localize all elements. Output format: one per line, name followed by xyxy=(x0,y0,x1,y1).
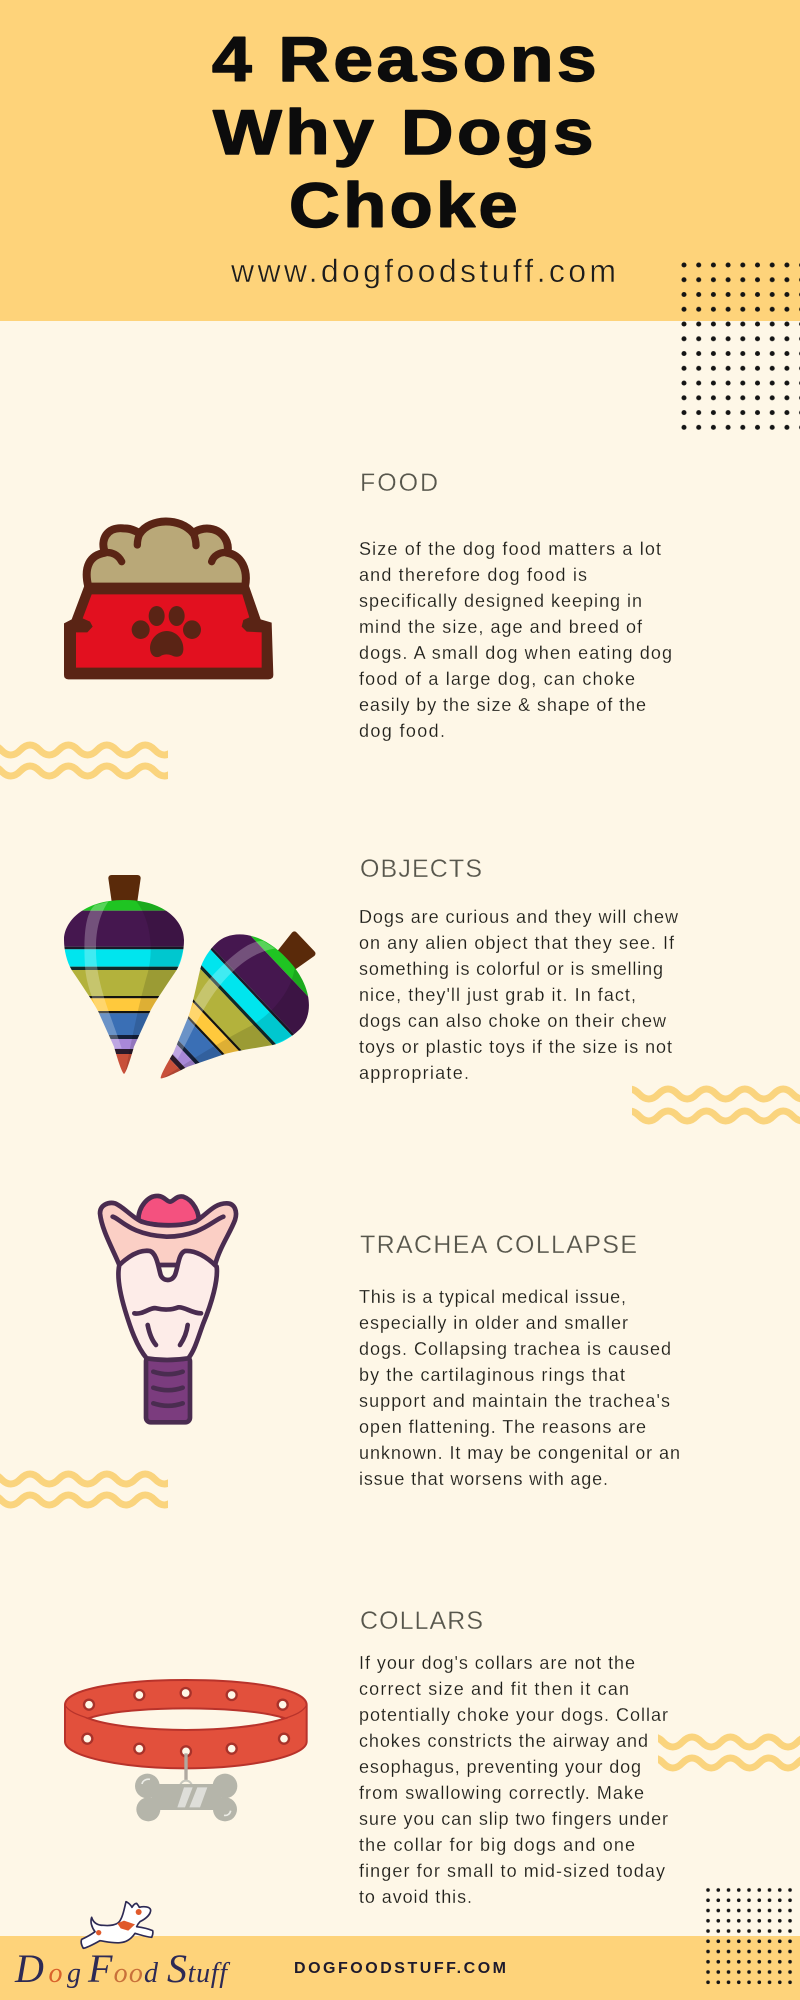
text: collars: potentially choke your dogs. Collar xyxy=(359,1705,668,1725)
text: collars: sure you can slip two fingers under xyxy=(359,1809,668,1829)
text: trachea collapse: open flattening. The reasons are xyxy=(359,1417,646,1437)
text: collars: correct size and fit then it can xyxy=(359,1679,629,1699)
text: food: and therefore dog food is xyxy=(359,565,587,585)
dot pattern: bottom right xyxy=(703,1885,795,1987)
text: food: dogs. A small dog when eating dog xyxy=(359,643,672,663)
panel: collars xyxy=(65,1607,800,1907)
text: food: specifically designed keeping in xyxy=(359,591,642,611)
text: collars: esophagus, preventing your dog xyxy=(359,1757,641,1777)
text: food xyxy=(359,539,672,741)
decorative wave: objects xyxy=(620,1089,800,1121)
panel: trachea collapse xyxy=(0,1196,680,1505)
text: objects xyxy=(359,907,679,1083)
text: food: food of a large dog, can choke xyxy=(359,669,635,689)
title: 4 Reasons xyxy=(212,25,600,95)
text: collars: If your dog's collars are not the xyxy=(359,1653,635,1673)
text: collars: chokes constricts the airway and xyxy=(359,1731,648,1751)
text: food: Size of the dog food matters a lot xyxy=(359,539,661,559)
text: trachea collapse: This is a typical medical issue, xyxy=(359,1287,626,1307)
title: Why Dogs xyxy=(213,98,597,168)
logo wordmark: Dog xyxy=(14,1946,81,1991)
text: food: mind the size, age and breed of xyxy=(359,617,643,637)
text: collars: to avoid this. xyxy=(359,1887,472,1907)
icon: food bowl xyxy=(64,521,273,679)
dot pattern: top right xyxy=(677,258,800,435)
text: trachea collapse: dogs. Collapsing trachea is caused xyxy=(359,1339,671,1359)
text: food: dog food. xyxy=(359,721,445,741)
heading: objects: OBJECTS xyxy=(360,855,482,883)
text: collars: finger for small to mid-sized today xyxy=(359,1861,665,1881)
text: trachea collapse: support and maintain the trachea's xyxy=(359,1391,670,1411)
text: trachea collapse: unknown. It may be congenital or an xyxy=(359,1443,680,1463)
icon: jumping dog xyxy=(81,1902,153,1948)
text: trachea collapse: by the cartilaginous rings that xyxy=(359,1365,625,1385)
text: collars xyxy=(359,1653,668,1907)
text: collars: from swallowing correctly. Make xyxy=(359,1783,644,1803)
title xyxy=(212,25,600,241)
icon: dog collar with bone tag xyxy=(65,1680,307,1821)
text: objects: Dogs are curious and they will chew xyxy=(359,907,679,927)
text: objects: appropriate. xyxy=(359,1063,469,1083)
heading: food: FOOD xyxy=(360,469,438,497)
website url: www.dogfoodstuff.com xyxy=(230,253,616,289)
text: objects: something is colorful or is smelling xyxy=(359,959,663,979)
logo wordmark xyxy=(14,1946,230,1991)
text: collars: the collar for big dogs and one xyxy=(359,1835,635,1855)
heading: trachea collapse: TRACHEA COLLAPSE xyxy=(360,1231,637,1259)
text: objects: dogs can also choke on their chew xyxy=(359,1011,667,1031)
text: trachea collapse: issue that worsens with age. xyxy=(359,1469,608,1489)
text: trachea collapse xyxy=(359,1287,680,1489)
text: objects: toys or plastic toys if the size is not xyxy=(359,1037,672,1057)
header band xyxy=(0,0,800,321)
panel: objects xyxy=(60,855,800,1127)
footer band xyxy=(0,1936,800,2000)
heading: collars: COLLARS xyxy=(360,1607,483,1635)
logo wordmark: Stuff xyxy=(167,1946,230,1991)
decorative wave: trachea collapse xyxy=(0,1474,193,1505)
icon: spinning tops xyxy=(64,875,316,1078)
icon: trachea xyxy=(100,1196,236,1422)
text: objects: nice, they'll just grab it. In fact, xyxy=(359,985,636,1005)
text: objects: on any alien object that they see. If xyxy=(359,933,675,953)
title: Choke xyxy=(289,171,521,241)
decorative wave: collars xyxy=(644,1737,800,1768)
footer logo xyxy=(14,1902,230,1991)
footer website text: DOGFOODSTUFF.COM xyxy=(294,1960,506,1977)
text: food: easily by the size & shape of the xyxy=(359,695,646,715)
logo wordmark: Food xyxy=(87,1946,159,1991)
text: trachea collapse: especially in older and smaller xyxy=(359,1313,628,1333)
decorative wave: food xyxy=(0,745,193,776)
panel: food xyxy=(0,469,672,776)
